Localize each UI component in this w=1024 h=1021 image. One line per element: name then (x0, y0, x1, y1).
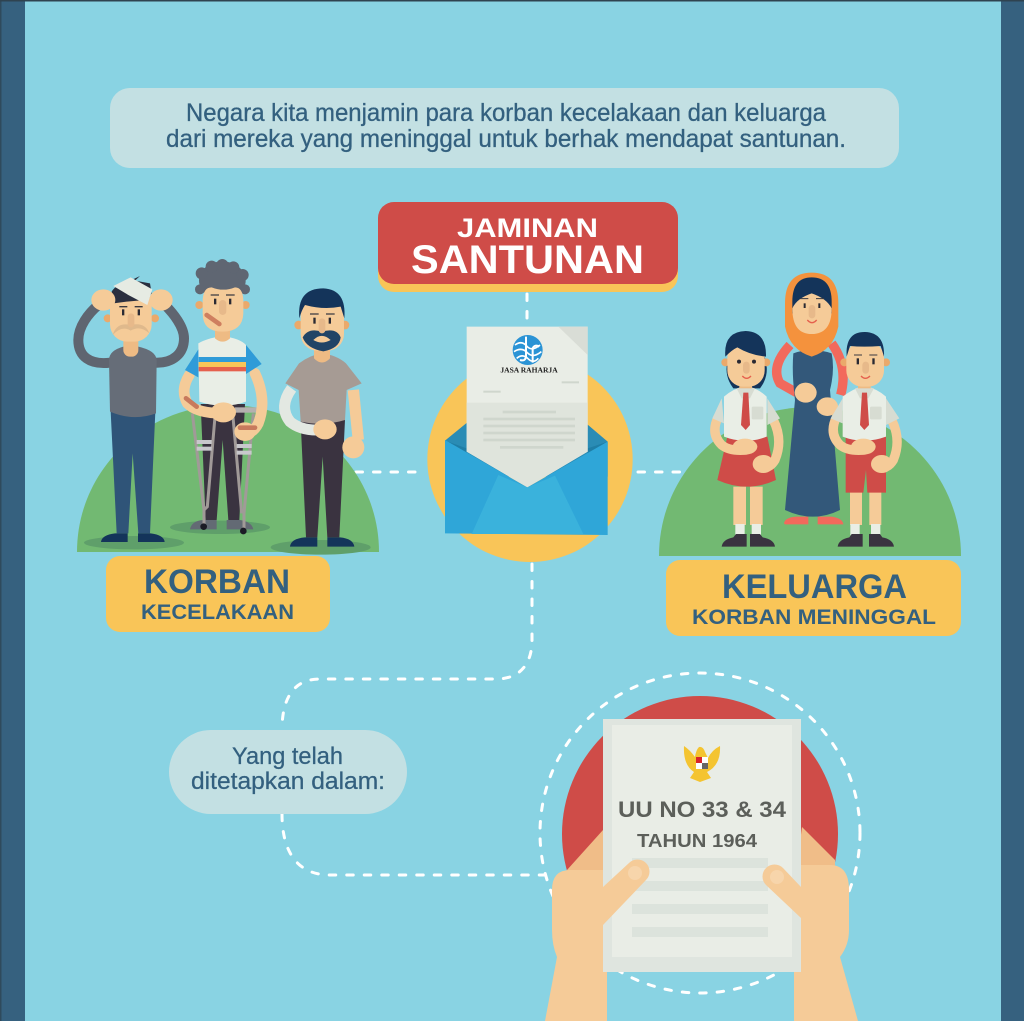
illustration: family (712, 273, 899, 547)
label: korban kecelakaan: KECELAKAAN (141, 601, 294, 624)
emblem: garuda (684, 746, 720, 782)
label: keluarga korban meninggal: KORBAN MENINGGAL (692, 606, 936, 629)
man with crutches (170, 259, 270, 534)
logo: jasa raharja: JASA RAHARJA (500, 366, 558, 375)
illustration: injured men (78, 259, 371, 555)
illustration: envelope with letter (427, 327, 633, 562)
left thumb (603, 859, 650, 925)
mother in hijab (777, 273, 843, 524)
heading: jaminan santunan: JAMINAN (457, 213, 598, 243)
intro text panel (110, 88, 899, 168)
dashed connector lines (282, 294, 692, 875)
hill: right (659, 407, 961, 556)
label: keluarga korban meninggal (666, 560, 961, 636)
heading: jaminan santunan (378, 202, 678, 292)
boy in school uniform (831, 332, 899, 547)
label: keluarga korban meninggal: KELUARGA (722, 568, 907, 606)
man with beard and bandaged arm (271, 288, 371, 555)
callout: yang telah ditetapkan dalam (169, 730, 407, 814)
left hand (545, 870, 607, 1021)
document: UU NO 33 & 34 (618, 797, 787, 822)
heading: jaminan santunan: SANTUNAN (411, 238, 644, 282)
document: TAHUN 1964 (637, 830, 758, 851)
girl in school uniform (712, 331, 780, 547)
letter (467, 327, 588, 487)
callout: yang telah ditetapkan dalam: Yang telah (232, 743, 343, 770)
label: korban kecelakaan: KORBAN (144, 563, 290, 601)
right hand (794, 865, 858, 1021)
label: korban kecelakaan (106, 556, 330, 632)
intro text panel: Negara kita menjamin para korban kecelakaan dan keluarga (186, 99, 826, 127)
envelope front (445, 440, 608, 535)
document (603, 719, 801, 972)
callout: yang telah ditetapkan dalam: ditetapkan dalam: (191, 768, 385, 795)
right thumb (762, 864, 801, 918)
illustration: hands holding law document (540, 673, 860, 1021)
logo: jasa raharja (500, 335, 558, 375)
hill: left (77, 405, 379, 552)
intro text panel: dari mereka yang meninggal untuk berhak mendapat santunan. (166, 125, 846, 153)
man with head bandage (78, 276, 184, 549)
